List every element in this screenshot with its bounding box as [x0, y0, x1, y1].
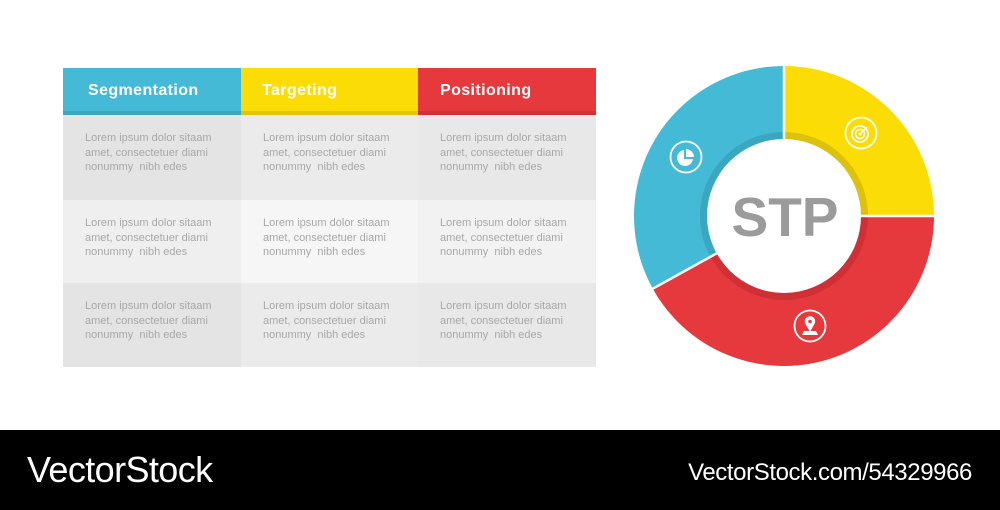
cell r1c1: Lorem ipsum dolor sitaam [85, 132, 212, 144]
header: Segmentation [63, 68, 241, 115]
segment: yellow [784, 66, 934, 216]
cell r3c3: amet, consectetuer diami [440, 314, 563, 326]
icon: location pin [794, 310, 826, 342]
cell r3c1: amet, consectetuer diami [85, 314, 208, 326]
cell r3c2: nonummy nibh edes [263, 329, 365, 341]
cell r2c3: amet, consectetuer diami [440, 232, 563, 244]
cell r1c1 [63, 115, 241, 200]
segment: blue [634, 66, 784, 289]
cell r3c2: amet, consectetuer diami [263, 314, 386, 326]
cell r2c3: Lorem ipsum dolor sitaam [440, 217, 567, 229]
table [63, 68, 596, 367]
icon: pie chart [670, 142, 702, 172]
cell r1c3: amet, consectetuer diami [440, 146, 563, 158]
cell r3c1 [63, 283, 241, 367]
header: Positioning [418, 68, 596, 115]
cell r2c1: nonummy nibh edes [85, 246, 187, 258]
cell r3c2: Lorem ipsum dolor sitaam [263, 300, 390, 312]
footer brand: VectorStock [27, 449, 212, 490]
cell r2c3 [418, 200, 596, 285]
cell r2c2 [241, 200, 418, 285]
cell r3c3: nonummy nibh edes [440, 329, 542, 341]
header: Targeting: Targeting [262, 82, 337, 99]
cell r1c1: nonummy nibh edes [85, 161, 187, 173]
segment: red [653, 216, 934, 366]
cell r3c3 [418, 283, 596, 367]
header: Positioning: Positioning [440, 82, 532, 99]
cell r3c2 [241, 283, 418, 367]
cell r1c3 [418, 115, 596, 200]
cell r1c1: amet, consectetuer diami [85, 146, 208, 158]
cell r1c2: nonummy nibh edes [263, 161, 365, 173]
cell r2c2: amet, consectetuer diami [263, 232, 386, 244]
cell r1c2: Lorem ipsum dolor sitaam [263, 132, 390, 144]
cell r2c1 [63, 200, 241, 285]
cell r2c2: nonummy nibh edes [263, 246, 365, 258]
cell r3c1: Lorem ipsum dolor sitaam [85, 300, 212, 312]
cell r3c3: Lorem ipsum dolor sitaam [440, 300, 567, 312]
cell r2c1: Lorem ipsum dolor sitaam [85, 217, 212, 229]
cell r1c3: Lorem ipsum dolor sitaam [440, 132, 567, 144]
cell r1c2: amet, consectetuer diami [263, 146, 386, 158]
icon: target [846, 118, 876, 148]
cell r1c3: nonummy nibh edes [440, 161, 542, 173]
cell r2c1: amet, consectetuer diami [85, 232, 208, 244]
cell r1c2 [241, 115, 418, 200]
header: Targeting [241, 68, 418, 115]
cell r2c3: nonummy nibh edes [440, 246, 542, 258]
header: Segmentation: Segmentation [88, 82, 199, 99]
cell r3c1: nonummy nibh edes [85, 329, 187, 341]
footer bar [0, 430, 1000, 510]
footer url: VectorStock.com/54329966 [688, 459, 972, 486]
center label STP: STP [732, 186, 838, 248]
cell r2c2: Lorem ipsum dolor sitaam [263, 217, 390, 229]
